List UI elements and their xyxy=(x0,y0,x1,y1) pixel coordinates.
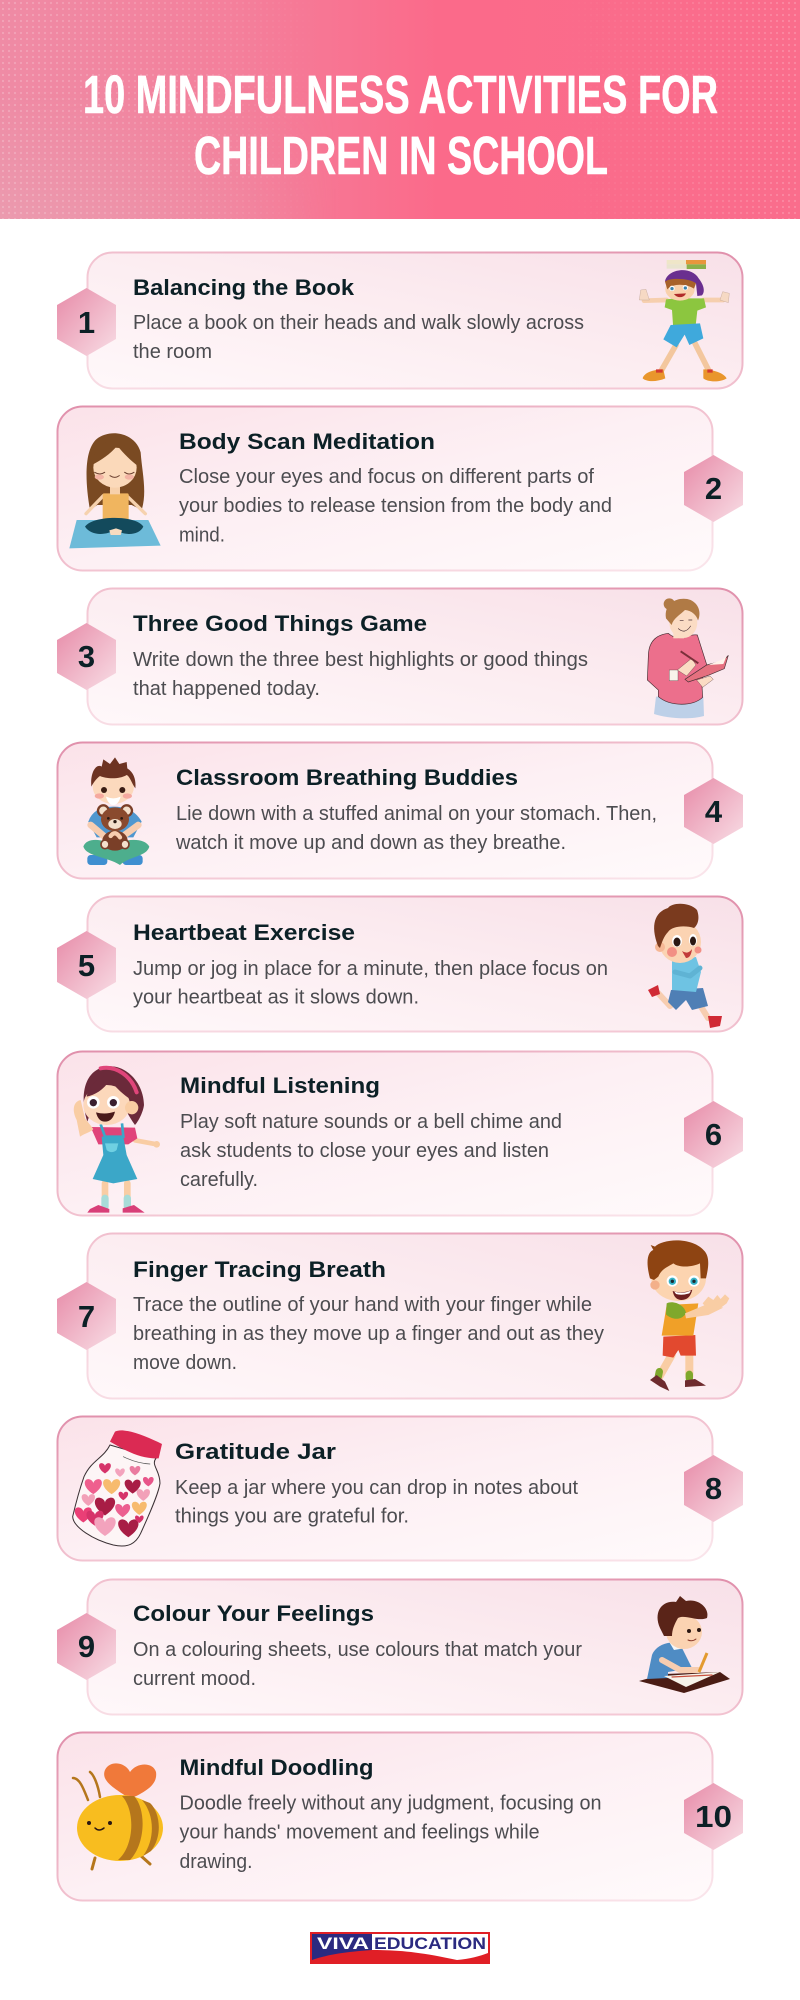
heading: Mindful Listening xyxy=(180,1073,380,1098)
panel: 4 Classroom Breathing Buddies xyxy=(58,742,743,878)
description: the room xyxy=(133,341,212,363)
number badge 4 xyxy=(684,778,743,844)
number badge 7: 7 xyxy=(78,1299,95,1334)
description xyxy=(133,958,608,1008)
header banner xyxy=(0,0,800,219)
heading: Finger Tracing Breath xyxy=(133,1257,386,1282)
heading: Three Good Things Game xyxy=(133,611,427,636)
description: your heartbeat as it slows down. xyxy=(133,986,419,1008)
heading: Gratitude Jar xyxy=(175,1439,337,1464)
description: On a colouring sheets, use colours that match your xyxy=(133,1639,582,1661)
description xyxy=(133,1294,604,1374)
title: CHILDREN IN SCHOOL xyxy=(194,126,608,186)
panel: 2 Body Scan Meditation xyxy=(58,406,743,570)
logo: Viva Education: VIVA xyxy=(317,1934,369,1953)
icon: woman writing in notebook xyxy=(647,598,728,718)
panel: 8 Gratitude Jar xyxy=(58,1416,743,1560)
panel: 5 Heartbeat Exercise xyxy=(57,896,742,1032)
panel: 10 Mindful Doodling xyxy=(58,1732,743,1900)
icon: boy jogging xyxy=(648,904,722,1028)
description: carefully. xyxy=(180,1169,258,1191)
heading: Classroom Breathing Buddies xyxy=(176,765,518,790)
description: things you are grateful for. xyxy=(175,1506,409,1528)
panel: 7 Finger Tracing Breath xyxy=(57,1234,742,1398)
icon: jar of hearts xyxy=(73,1430,162,1546)
description: breathing in as they move up a finger and out as they xyxy=(133,1323,604,1345)
heading: Balancing the Book xyxy=(133,275,355,300)
icon: girl meditating on mat xyxy=(69,433,161,548)
description xyxy=(133,312,584,363)
panel: 9 Colour Your Feelings xyxy=(57,1580,742,1714)
number badge 5 xyxy=(57,931,116,999)
number badge 6 xyxy=(684,1101,743,1168)
title xyxy=(83,65,718,186)
heading: Colour Your Feelings xyxy=(133,1601,374,1626)
description: Write down the three best highlights or good things xyxy=(133,649,588,671)
number badge 10: 10 xyxy=(695,1799,732,1834)
number badge 8 xyxy=(684,1455,743,1522)
description: Keep a jar where you can drop in notes about xyxy=(175,1477,578,1499)
panel: 1 Balancing the Book xyxy=(57,252,742,388)
description: your hands' movement and feelings while xyxy=(180,1822,540,1844)
panel: 3 Three Good Things Game xyxy=(57,588,742,724)
description xyxy=(175,803,657,854)
panel: 6 Mindful Listening xyxy=(58,1052,743,1216)
icon: girl listening with hand to ear xyxy=(74,1066,160,1213)
logo: Viva Education: EDUCATION xyxy=(374,1934,486,1953)
icon: boy colouring at desk xyxy=(639,1596,730,1693)
number badge 3 xyxy=(57,623,116,690)
number badge 9: 9 xyxy=(78,1629,95,1664)
heading: Mindful Doodling xyxy=(180,1755,374,1780)
description: Doodle freely without any judgment, focusing on xyxy=(180,1792,602,1814)
description xyxy=(175,1477,578,1528)
description: ask students to close your eyes and listen xyxy=(180,1140,549,1162)
number badge 1 xyxy=(57,288,116,356)
description: Play soft nature sounds or a bell chime and xyxy=(180,1111,562,1133)
description xyxy=(179,466,612,546)
description: Place a book on their heads and walk slowly across xyxy=(133,312,584,334)
number badge 2: 2 xyxy=(705,471,722,506)
logo: Viva Education xyxy=(310,1932,490,1964)
number badge 2 xyxy=(684,455,743,522)
number badge 9 xyxy=(57,1613,116,1680)
icon: boy balancing books xyxy=(639,260,729,381)
heading: Body Scan Meditation xyxy=(179,429,435,454)
description: drawing. xyxy=(180,1851,252,1873)
description: move down. xyxy=(133,1352,237,1374)
description: mind. xyxy=(179,524,225,546)
description: Jump or jog in place for a minute, then place focus on xyxy=(133,958,608,980)
number badge 4: 4 xyxy=(705,794,723,829)
number badge 6: 6 xyxy=(705,1117,722,1152)
description xyxy=(133,649,588,700)
description: Trace the outline of your hand with your finger while xyxy=(133,1294,592,1316)
number badge 3: 3 xyxy=(78,639,95,674)
number badge 7 xyxy=(57,1282,116,1350)
description xyxy=(133,1639,582,1690)
description: Lie down with a stuffed animal on your stomach. Then, xyxy=(176,803,657,825)
description: watch it move up and down as they breathe. xyxy=(175,832,566,854)
description: Close your eyes and focus on different parts of xyxy=(179,466,594,488)
icon: bee with heart wings xyxy=(73,1763,163,1869)
icon: boy hugging teddy bear xyxy=(83,757,149,865)
description: current mood. xyxy=(133,1668,256,1690)
number badge 1: 1 xyxy=(78,305,95,340)
heading: Heartbeat Exercise xyxy=(133,920,355,945)
description: your bodies to release tension from the body and xyxy=(179,495,612,517)
number badge 10 xyxy=(684,1783,743,1850)
description xyxy=(180,1111,562,1191)
icon: boy waving hand xyxy=(648,1240,729,1391)
description: that happened today. xyxy=(133,678,320,700)
number badge 8: 8 xyxy=(705,1471,722,1506)
description xyxy=(180,1792,602,1873)
number badge 5: 5 xyxy=(78,948,95,983)
